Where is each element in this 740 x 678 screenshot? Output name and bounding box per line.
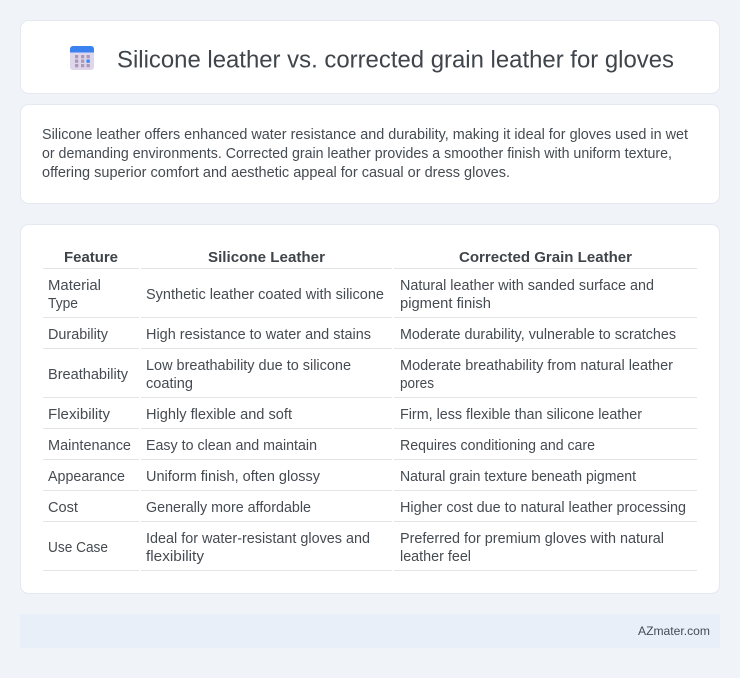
title: Silicone leather vs. corrected grain leather for gloves [117,46,674,74]
row: flexibility: Firm, less flexible than silicone leather [400,407,642,423]
table header: Silicone Leather [208,250,325,266]
row: use case: Preferred for premium gloves with natural [400,531,664,547]
row: material type: Natural leather with sanded surface and [400,278,654,294]
row: appearance [48,469,636,485]
row: use case: Ideal for water-resistant gloves and [146,531,370,547]
row: durability [48,327,676,343]
text block: summary: or demanding environments. Corrected grain leather provides a smoother finish with uniform texture, [42,146,672,162]
row: maintenance [48,438,595,454]
text block: summary: offering superior comfort and aesthetic appeal for casual or dress gloves. [42,165,510,181]
row: cost [48,500,686,516]
row: material type: Type [48,296,78,312]
row: breathability: Low breathability due to silicone [146,358,351,374]
row: use case [48,531,664,565]
row: maintenance: Easy to clean and maintain [146,438,317,454]
row: cost: Higher cost due to natural leather processing [400,500,686,516]
row: breathability: pores [400,376,434,392]
row: breathability: coating [146,376,193,392]
row: durability: High resistance to water and stains [146,327,371,343]
row: durability: Durability [48,327,109,343]
row: flexibility: Highly flexible and soft [146,407,292,423]
text block: summary [42,127,688,181]
table header [64,250,632,266]
row: appearance: Appearance [48,469,125,485]
footer source label: AZmater.com [638,624,710,638]
row: cost: Generally more affordable [146,500,311,516]
row: maintenance: Maintenance [48,438,131,454]
row: breathability: Moderate breathability from natural leather [400,358,673,374]
panel: comparison table [20,224,720,594]
row: flexibility: Flexibility [48,407,111,423]
row: use case: flexibility [146,549,205,565]
footer [20,614,720,648]
row: material type: pigment finish [400,296,491,312]
row: breathability [48,358,673,392]
row: use case: Use Case [48,540,108,556]
row: material type: Material [48,278,101,294]
text block: summary: Silicone leather offers enhanced water resistance and durability, making it ideal for gloves used in wet [42,127,688,143]
row: material type [48,278,654,312]
row: cost: Cost [48,500,78,516]
row: durability: Moderate durability, vulnerable to scratches [400,327,676,343]
panel: header [20,20,720,94]
table header: Feature [64,250,118,266]
row: use case: leather feel [400,549,471,565]
row: breathability: Breathability [48,367,129,383]
row: appearance: Natural grain texture beneath pigment [400,469,636,485]
panel: intro text [20,104,720,204]
row: flexibility [48,407,642,423]
row: material type: Synthetic leather coated with silicone [146,287,384,303]
row: appearance: Uniform finish, often glossy [146,469,321,485]
table header: Corrected Grain Leather [459,250,632,266]
icon: calendar [70,46,94,70]
row: maintenance: Requires conditioning and care [400,438,595,454]
